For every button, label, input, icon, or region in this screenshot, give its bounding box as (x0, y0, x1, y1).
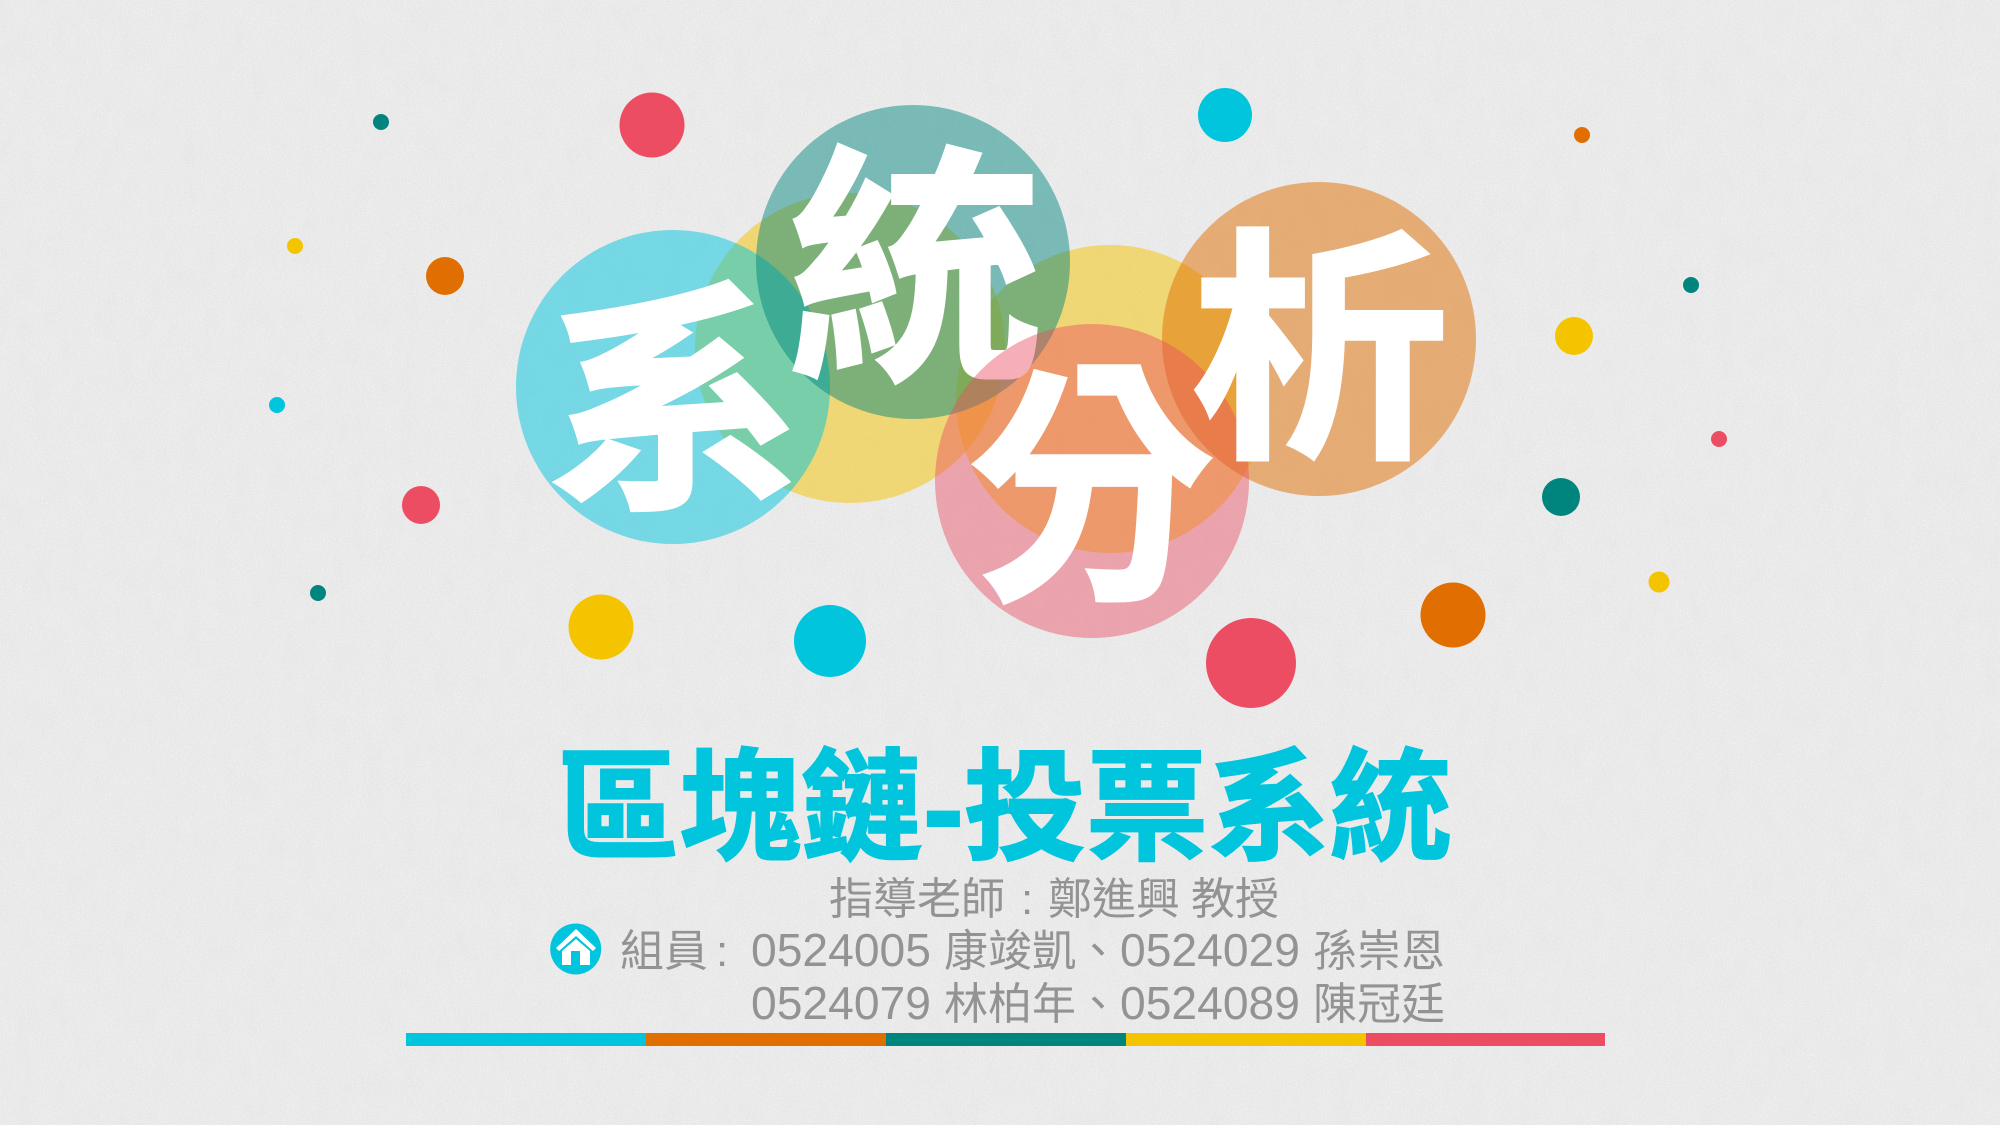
members label and first row: 0524005 (751, 924, 931, 976)
icon: home badge (550, 924, 601, 974)
character: 析: 析 (1190, 215, 1450, 491)
teal circle (756, 105, 1070, 419)
decorative confetti dots (269, 88, 1727, 708)
character: 分: 分 (969, 349, 1215, 634)
members label and first row: 組員 (620, 927, 708, 976)
members second row: 0524089 (1120, 977, 1300, 1029)
members label and first row: 孫崇恩 (1313, 927, 1445, 976)
pink circle (935, 324, 1249, 638)
members label and first row: 康竣凱、 (944, 927, 1120, 976)
main title: 區塊鏈-投票系統 (557, 740, 1452, 876)
yellow circle right (956, 245, 1264, 553)
character: 系: 系 (544, 269, 804, 541)
advisor line (829, 875, 1279, 924)
members label and first row: 0524029 (1120, 924, 1300, 976)
advisor line: 指導老師 (829, 875, 1005, 924)
cyan circle (516, 230, 830, 544)
members second row: 0524079 (751, 977, 931, 1029)
advisor line: : (1021, 875, 1033, 924)
members label and first row: : (716, 927, 728, 976)
colour stripe (406, 1033, 1605, 1046)
character: 統: 統 (789, 132, 1043, 414)
advisor line: 鄭進興 (1048, 875, 1180, 924)
members second row (751, 977, 1445, 1029)
advisor line: 教授 (1191, 875, 1279, 924)
orange circle (1162, 182, 1476, 496)
members second row: 陳冠廷 (1313, 980, 1445, 1029)
members second row: 林柏年、 (944, 980, 1120, 1029)
members label and first row (620, 924, 1445, 976)
yellow circle left (695, 193, 1005, 503)
